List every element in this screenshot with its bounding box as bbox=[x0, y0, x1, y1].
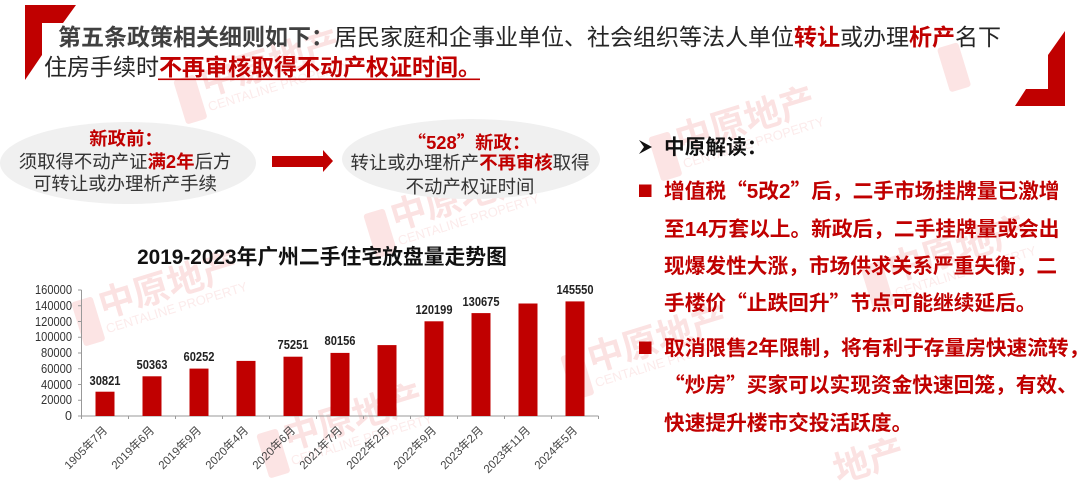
data labels: 75251 bbox=[278, 338, 309, 352]
watermarks: 中原地产 bbox=[582, 298, 732, 380]
axes bbox=[78, 290, 598, 419]
data labels bbox=[90, 283, 594, 388]
y axis labels: 100000 bbox=[35, 330, 72, 344]
watermarks: 中原地产 bbox=[93, 244, 243, 326]
bottom-right corner bracket bbox=[1015, 31, 1065, 106]
chart title: 2019-2023年广州二手住宅放盘量走势图 bbox=[137, 245, 507, 269]
oval: 528 new policy: 不动产权证时间 bbox=[406, 176, 534, 197]
commentary heading: 中原解读： bbox=[664, 136, 767, 159]
y axis labels: 120000 bbox=[35, 315, 72, 329]
x axis labels: 2023年11月 bbox=[480, 423, 533, 476]
oval: before the new policy: 新政前： bbox=[89, 128, 163, 149]
watermarks: 中原地产 bbox=[278, 376, 428, 458]
commentary point 2: 快速提升楼市交投活跃度。 bbox=[664, 411, 912, 435]
x axis labels: 2022年9月 bbox=[390, 423, 439, 472]
watermarks: CENTALINE PROPERTY bbox=[104, 279, 249, 336]
y axis labels bbox=[35, 283, 72, 423]
x axis labels: 2020年4月 bbox=[202, 423, 251, 472]
watermarks: 地产 bbox=[828, 430, 909, 490]
oval: 528 new policy: 转让或办理析产不再审核取得 bbox=[350, 152, 590, 173]
watermarks: 中原地产 bbox=[195, 22, 345, 104]
x axis labels: 2020年6月 bbox=[249, 423, 298, 472]
watermarks: CENTALINE PROPERTY bbox=[289, 411, 434, 468]
watermarks: 中原地产 bbox=[670, 79, 820, 161]
bar chart bbox=[35, 283, 598, 476]
commentary point 1: 手楼价“止跌回升”节点可能继续延后。 bbox=[664, 286, 1036, 316]
commentary point 1: 增值税“5改2”后，二手市场挂牌量已激增 bbox=[664, 174, 1059, 204]
x axis labels: 1905年7月 bbox=[61, 423, 110, 472]
x axis labels: 2022年2月 bbox=[343, 423, 392, 472]
title text: 第五条政策相关细则如下：居民家庭和企事业单位、社会组织等法人单位转让或办理析产名下 bbox=[58, 24, 1001, 50]
x axis labels: 2019年6月 bbox=[108, 423, 157, 472]
commentary point 1 bbox=[639, 174, 1059, 316]
watermarks: 中原地产 bbox=[385, 156, 535, 238]
commentary point 2: 取消限售2年限制，将有利于存量房快速流转， bbox=[664, 337, 1080, 360]
commentary point 2 bbox=[639, 337, 1080, 435]
x axis labels: 2019年9月 bbox=[155, 423, 204, 472]
top-left corner bracket bbox=[25, 5, 76, 80]
oval: before the new policy: 须取得不动产证满2年后方 bbox=[19, 151, 231, 172]
data labels: 30821 bbox=[90, 374, 121, 388]
x axis labels bbox=[61, 423, 580, 476]
x axis labels: 2023年2月 bbox=[437, 423, 486, 472]
commentary point 1: 至14万套以上。新政后，二手挂牌量或会出 bbox=[664, 217, 1059, 241]
watermarks: 中原地产 bbox=[882, 208, 1032, 290]
commentary point 1: 现爆发性大涨，市场供求关系严重失衡，二 bbox=[664, 254, 1057, 278]
data labels: 60252 bbox=[184, 350, 215, 364]
bars bbox=[96, 301, 584, 416]
data labels: 50363 bbox=[136, 358, 168, 372]
data labels: 145550 bbox=[556, 283, 594, 297]
watermarks: CENTALINE PROPERTY bbox=[681, 114, 826, 171]
arrow bbox=[272, 150, 333, 172]
y axis labels: 40000 bbox=[41, 378, 72, 392]
title text: 住房手续时不再审核取得不动产权证时间。 bbox=[44, 54, 481, 80]
watermarks: CENTALINE PROPERTY bbox=[206, 57, 351, 114]
y axis labels: 140000 bbox=[35, 299, 72, 313]
y axis labels: 160000 bbox=[35, 283, 72, 297]
x axis labels: 2024年5月 bbox=[531, 423, 580, 472]
commentary point 2: “炒房”买家可以实现资金快速回笼，有效、 bbox=[664, 368, 1078, 398]
watermarks: CENTALINE PROPERTY bbox=[593, 333, 738, 390]
oval: before the new policy: 可转让或办理析产手续 bbox=[33, 173, 217, 194]
title text bbox=[44, 24, 1001, 80]
watermarks: CENTALINE PROPERTY bbox=[893, 243, 1038, 300]
y axis labels: 20000 bbox=[41, 393, 72, 407]
data labels: 80156 bbox=[324, 334, 356, 348]
oval: 528 new policy: “528”新政： bbox=[408, 129, 530, 155]
oval: before the new policy bbox=[0, 122, 256, 204]
watermarks: CENTALINE PROPERTY bbox=[396, 191, 541, 248]
y axis labels: 60000 bbox=[41, 362, 72, 376]
y axis labels: 0 bbox=[65, 409, 72, 423]
oval: 528 new policy bbox=[342, 119, 600, 199]
y axis labels: 80000 bbox=[41, 346, 72, 360]
x axis labels: 2021年7月 bbox=[296, 423, 345, 472]
data labels: 130675 bbox=[462, 295, 500, 309]
data labels: 120199 bbox=[416, 303, 453, 317]
